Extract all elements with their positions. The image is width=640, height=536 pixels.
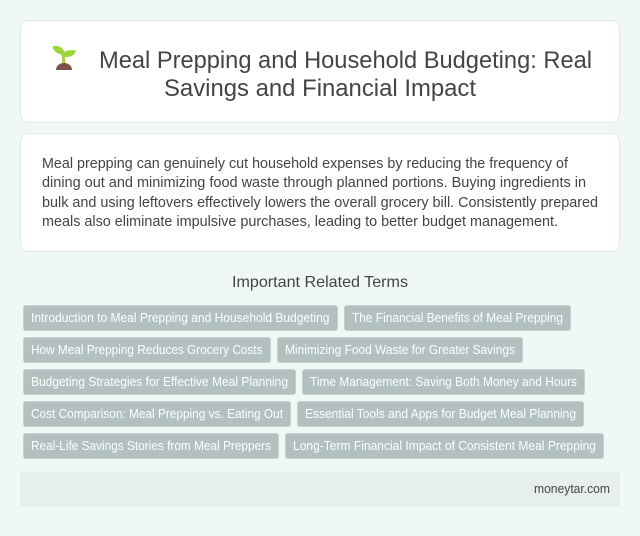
tag [24, 306, 338, 330]
tag: Real-Life Savings Stories from Meal Preppers [31, 439, 271, 453]
panel: title card [20, 20, 620, 122]
tag [344, 306, 570, 330]
footer bar [20, 472, 620, 506]
tag list: related terms [24, 306, 604, 458]
title text: Meal Prepping and Household Budgeting: Real [99, 47, 592, 74]
footer source text: moneytar.com [534, 482, 610, 496]
tag: Essential Tools and Apps for Budget Meal Planning [305, 407, 576, 421]
tag: Budgeting Strategies for Effective Meal Planning [31, 375, 288, 389]
tag [24, 370, 296, 394]
title text: Savings and Financial Impact [164, 75, 476, 102]
tag: How Meal Prepping Reduces Grocery Costs [31, 343, 262, 357]
tag: Long-Term Financial Impact of Consistent Meal Prepping [293, 439, 596, 453]
tag: Cost Comparison: Meal Prepping vs. Eating Out [31, 407, 283, 421]
tag [298, 402, 584, 426]
summary text: bulk and using leftovers effectively lowers the overall grocery bill. Consistently prepared [42, 195, 598, 211]
tag: Introduction to Meal Prepping and Household Budgeting [31, 311, 330, 325]
tag: Minimizing Food Waste for Greater Savings [285, 343, 515, 357]
tag [302, 370, 584, 394]
summary text: dining out and minimizing food waste through planned portions. Buying ingredients in [42, 175, 586, 191]
tag [24, 402, 290, 426]
tag: The Financial Benefits of Meal Prepping [352, 311, 563, 325]
summary text: Meal prepping can genuinely cut household expenses by reducing the frequency of [42, 156, 569, 172]
summary text: meals also eliminate impulsive purchases, leading to better budget management. [42, 214, 558, 230]
tag [278, 338, 522, 362]
tag: Time Management: Saving Both Money and Hours [310, 375, 577, 389]
tag [24, 338, 270, 362]
panel: summary card [20, 134, 620, 252]
tag [286, 434, 604, 458]
icon: seedling [52, 46, 76, 70]
heading: related terms: Important Related Terms [232, 274, 408, 291]
tag [24, 434, 278, 458]
